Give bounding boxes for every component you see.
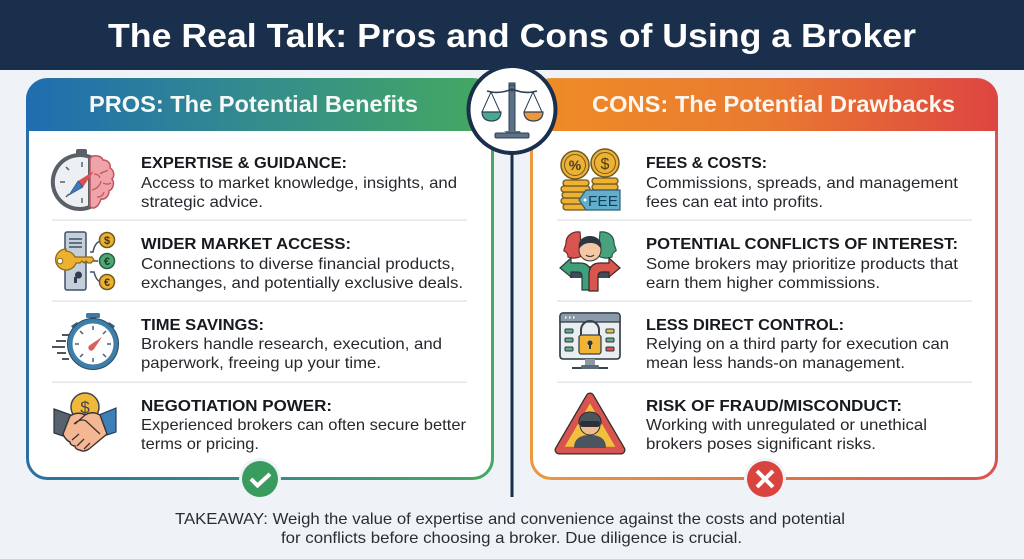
pros header: PROS: The Potential Benefits bbox=[89, 91, 418, 117]
description: Access to market knowledge, insights, and bbox=[141, 175, 457, 192]
icon: key and currency coins bbox=[56, 232, 114, 290]
icon: key and currency coins: € bbox=[104, 256, 110, 268]
center divider line bbox=[510, 150, 514, 497]
row: conflicts of interest bbox=[560, 232, 959, 292]
row: wider market access bbox=[56, 232, 463, 292]
description bbox=[141, 417, 467, 453]
icon: key and currency coins: $ bbox=[104, 235, 110, 247]
heading: EXPERTISE & GUIDANCE: bbox=[141, 155, 347, 172]
description: earn them higher commissions. bbox=[646, 275, 880, 292]
heading: LESS DIRECT CONTROL: bbox=[646, 317, 844, 334]
description: fees can eat into profits. bbox=[646, 194, 823, 211]
description bbox=[646, 175, 959, 211]
icon: key and currency coins: € bbox=[104, 277, 110, 289]
heading: RISK OF FRAUD/MISCONDUCT: bbox=[646, 398, 902, 415]
cons header: CONS: The Potential Drawbacks bbox=[592, 91, 955, 117]
row: less direct control bbox=[560, 313, 949, 372]
description: terms or pricing. bbox=[141, 436, 259, 453]
takeaway text: for conflicts before choosing a broker. Due diligence is crucial. bbox=[281, 530, 742, 547]
row: risk of fraud bbox=[559, 397, 927, 453]
row: time savings bbox=[52, 313, 442, 372]
description: mean less hands-on management. bbox=[646, 355, 905, 372]
description bbox=[141, 256, 463, 292]
icon: coins and fee tag bbox=[561, 149, 620, 210]
icon: coins and fee tag: % bbox=[569, 157, 582, 173]
takeaway text bbox=[175, 511, 845, 547]
heading: FEES & COSTS: bbox=[646, 155, 767, 172]
description: Commissions, spreads, and management bbox=[646, 175, 959, 192]
icon: stopwatch bbox=[52, 313, 118, 370]
scales emblem bbox=[468, 66, 556, 153]
description: Connections to diverse financial products, bbox=[141, 256, 455, 273]
panel: cons bbox=[530, 79, 998, 500]
icon: handshake with coin bbox=[54, 393, 116, 451]
description: Some brokers may prioritize products that bbox=[646, 256, 959, 273]
pros header bbox=[26, 79, 494, 131]
icon: coins and fee tag: $ bbox=[601, 156, 610, 173]
description bbox=[646, 417, 927, 453]
icon: warning triangle with burglar bbox=[559, 397, 621, 450]
description: brokers poses significant risks. bbox=[646, 436, 876, 453]
row: fees and costs bbox=[561, 149, 959, 211]
heading: TIME SAVINGS: bbox=[141, 317, 264, 334]
description bbox=[141, 175, 457, 211]
description bbox=[646, 336, 949, 372]
takeaway text: TAKEAWAY: Weigh the value of expertise and convenience against the costs and potential bbox=[175, 511, 845, 528]
description: exchanges, and potentially exclusive deals. bbox=[141, 275, 463, 292]
cons header bbox=[530, 79, 998, 131]
description: Experienced brokers can often secure better bbox=[141, 417, 467, 434]
icon: handshake with coin: $ bbox=[80, 398, 90, 417]
heading: POTENTIAL CONFLICTS OF INTEREST: bbox=[646, 236, 958, 253]
row: expertise and guidance bbox=[53, 149, 457, 211]
heading: WIDER MARKET ACCESS: bbox=[141, 236, 351, 253]
panel: pros bbox=[26, 79, 494, 500]
description bbox=[141, 336, 442, 372]
description: Relying on a third party for execution can bbox=[646, 336, 949, 353]
description bbox=[646, 256, 959, 292]
icon: person with diverging arrows bbox=[560, 232, 620, 291]
description: Working with unregulated or unethical bbox=[646, 417, 927, 434]
icon: monitor with padlock bbox=[560, 313, 620, 369]
description: strategic advice. bbox=[141, 194, 263, 211]
heading: NEGOTIATION POWER: bbox=[141, 398, 332, 415]
badge: check mark bbox=[239, 458, 281, 500]
description: Brokers handle research, execution, and bbox=[141, 336, 442, 353]
icon: compass and brain bbox=[53, 149, 114, 209]
title banner: The Real Talk: Pros and Cons of Using a Broker bbox=[108, 17, 916, 54]
description: paperwork, freeing up your time. bbox=[141, 355, 381, 372]
badge: cross mark bbox=[744, 458, 786, 500]
title banner bbox=[0, 0, 1024, 70]
icon: coins and fee tag: FEE bbox=[588, 193, 618, 210]
row: negotiation power bbox=[54, 393, 467, 453]
